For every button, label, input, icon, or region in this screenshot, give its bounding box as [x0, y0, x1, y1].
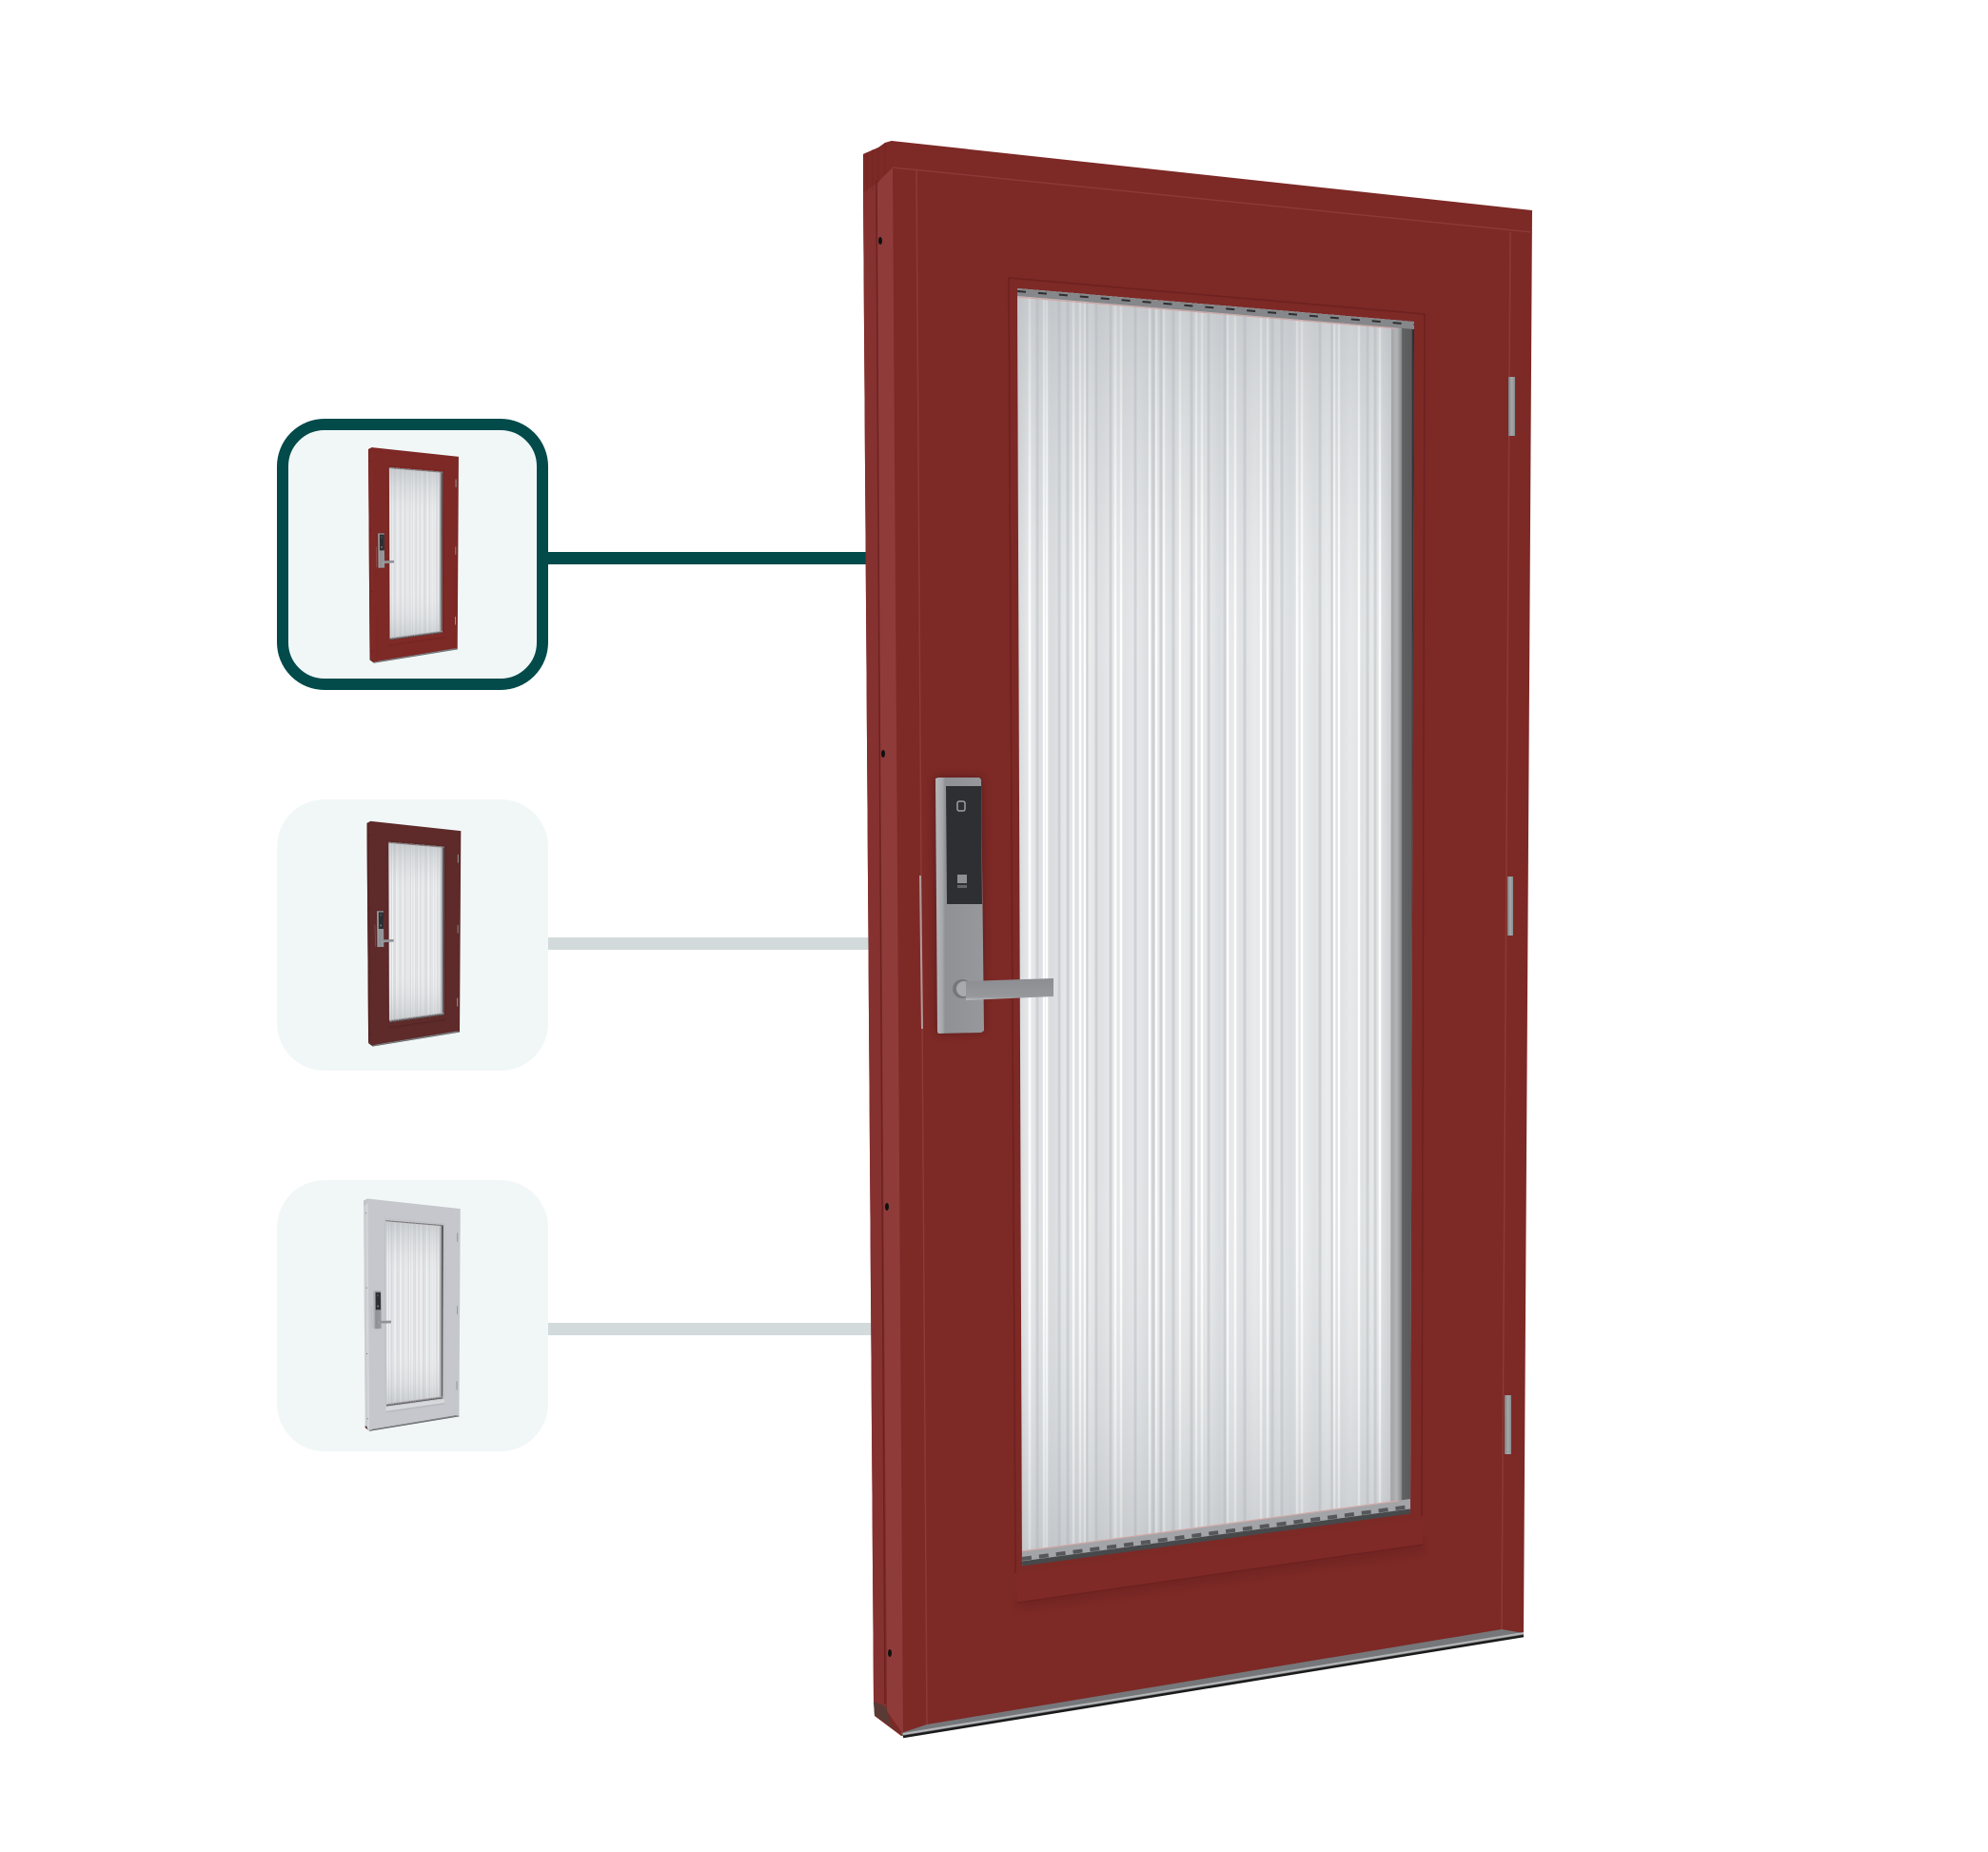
option card: red door (selected) — [283, 424, 542, 684]
door colour selector infographic — [277, 141, 1532, 1738]
option card: dark red door — [277, 799, 548, 1071]
thumbnail: red door — [368, 447, 459, 662]
connector: second option — [548, 937, 872, 950]
thumbnail: grey door — [364, 1199, 461, 1431]
connector: selected option — [542, 552, 870, 564]
main door: red with ribbed glass and electronic lock — [863, 141, 1532, 1737]
connector: third option — [548, 1323, 874, 1335]
option card: grey door — [277, 1180, 548, 1451]
thumbnail: dark red door — [367, 821, 461, 1046]
